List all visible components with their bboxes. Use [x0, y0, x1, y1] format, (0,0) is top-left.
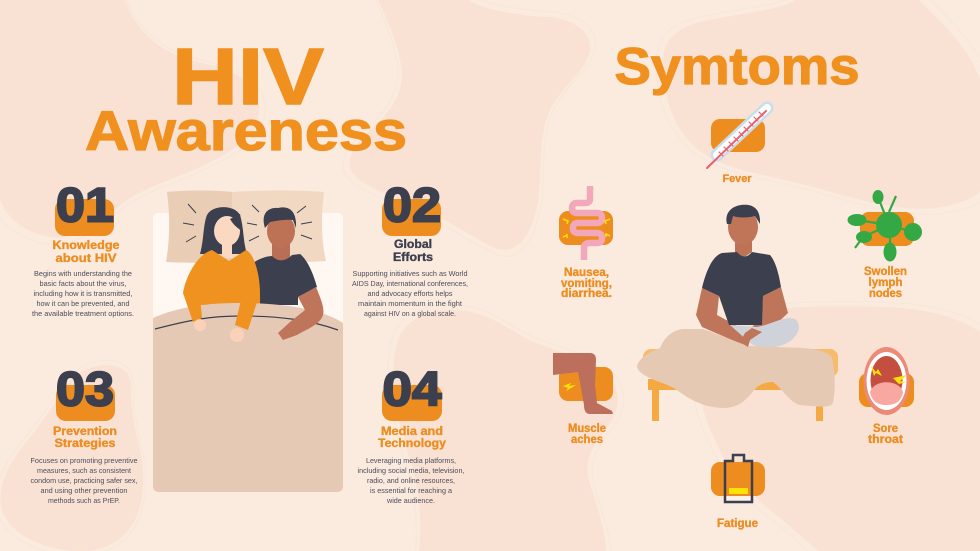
body text: is essential for reaching a [370, 486, 453, 495]
t-shirt [702, 252, 781, 325]
body text: Leveraging media platforms, [366, 456, 456, 465]
title: HIV Awareness: Awareness [85, 99, 407, 162]
symptom: Fatigue [711, 455, 765, 530]
label: nodes [869, 288, 902, 300]
label: lymph [868, 277, 902, 289]
number 01: 01 [56, 180, 114, 232]
woman [183, 207, 260, 305]
man arm [278, 287, 323, 340]
symptom: Nausea, vomiting, diarrhea [559, 186, 613, 300]
icon: thermometer [707, 108, 767, 168]
label: Fatigue [717, 518, 758, 530]
label: Muscle [568, 423, 606, 435]
label: Fever [722, 173, 752, 185]
symptom: Sore throat [859, 347, 914, 446]
symptom: Muscle aches [553, 353, 613, 446]
symptom: Fever [707, 108, 767, 185]
body text: maintain momentum in the fight [358, 299, 462, 308]
heading: Efforts [393, 252, 433, 264]
badge 03 [56, 385, 115, 421]
blanket [153, 303, 343, 492]
label: Sore [873, 423, 898, 435]
blanket [637, 329, 835, 408]
title: Symtoms: Symtoms [614, 38, 860, 96]
badge 04 [382, 385, 442, 421]
number 02: 02 [383, 180, 441, 232]
badge [711, 119, 765, 152]
icon: open mouth [864, 347, 910, 415]
body text: methods such as PrEP. [48, 496, 120, 505]
body text: Begins with understanding the [34, 269, 132, 278]
body text [352, 269, 468, 318]
blanket fold [155, 316, 338, 330]
number 03: 03 [56, 364, 114, 416]
body text: wide audience. [386, 496, 435, 505]
heading [393, 239, 433, 264]
body text: condom use, practicing safer sex, [30, 476, 138, 485]
icon: battery [725, 455, 752, 502]
label [561, 267, 612, 300]
badge [711, 462, 765, 496]
man [253, 207, 317, 305]
icon: leg [553, 353, 613, 414]
heading: about HIV [56, 253, 117, 265]
heading: Prevention [53, 426, 117, 438]
body text: the available treatment options. [32, 309, 134, 318]
label: throat [868, 434, 903, 446]
panel: 02 Global Efforts [352, 180, 468, 318]
body text: AIDS Day, international conferences, [352, 279, 468, 288]
body text: Focuses on promoting preventive [30, 456, 138, 465]
bed [643, 349, 838, 421]
body text [358, 456, 464, 505]
body text: and using other prevention [40, 486, 128, 495]
body text: Supporting initiatives such as World [352, 269, 468, 278]
body text: basic facts about the virus, [40, 279, 126, 288]
badge [559, 367, 613, 401]
heading [52, 240, 120, 265]
label: aches [571, 434, 603, 446]
arms [696, 287, 788, 347]
rays around heads [183, 204, 312, 242]
icon: pain bolt [563, 383, 576, 391]
panel: 01 Knowledge about HIV [32, 180, 134, 318]
label: Nausea, [564, 267, 609, 279]
heading: Strategies [54, 438, 116, 450]
body text [32, 269, 134, 318]
label: vomiting, [561, 278, 612, 290]
icon: intestines [572, 186, 602, 260]
badge 02 [382, 199, 441, 236]
heading [378, 426, 447, 450]
body text [30, 456, 138, 505]
body text: including how it is transmitted, [34, 289, 132, 298]
badge 01 [55, 199, 114, 236]
number 04: 04 [382, 364, 442, 416]
symptom: Swollen lymph nodes [848, 190, 922, 300]
label [568, 423, 606, 446]
badge [860, 212, 914, 246]
icon: cramp bolts [563, 219, 610, 238]
heading: Media and [381, 426, 443, 438]
head [726, 205, 760, 258]
hands [740, 328, 762, 347]
icon: lymph nodes [848, 190, 922, 261]
badge [859, 373, 914, 407]
label [864, 266, 907, 300]
illustration: couple in bed [153, 190, 343, 492]
body text: and advocacy efforts helps [368, 289, 453, 298]
heading: Global [394, 239, 432, 251]
body text: how it can be prevented, and [36, 299, 130, 308]
title: HIV Awareness [85, 32, 407, 162]
body text: measures, such as consistent [37, 466, 131, 475]
body text: against HIV on a global scale. [364, 309, 456, 318]
label: Swollen [864, 266, 907, 278]
panel: 04 Media and Technology [358, 364, 464, 505]
pillows [166, 190, 326, 263]
heading [53, 426, 117, 450]
heading: Technology [378, 438, 447, 450]
mattress [153, 213, 343, 333]
panel: 03 Prevention Strategies [30, 364, 138, 505]
body text: including social media, television, [358, 466, 464, 475]
woman arms and hands [183, 293, 260, 342]
body text: radio, and online resources, [367, 476, 455, 485]
central figure: seated man on bed [637, 205, 838, 421]
title: HIV Awareness: HIV [172, 32, 324, 121]
label [868, 423, 903, 446]
label: diarrhea. [561, 288, 612, 300]
badge [559, 211, 613, 245]
heading: Knowledge [52, 240, 120, 252]
crossed leg [730, 318, 799, 348]
